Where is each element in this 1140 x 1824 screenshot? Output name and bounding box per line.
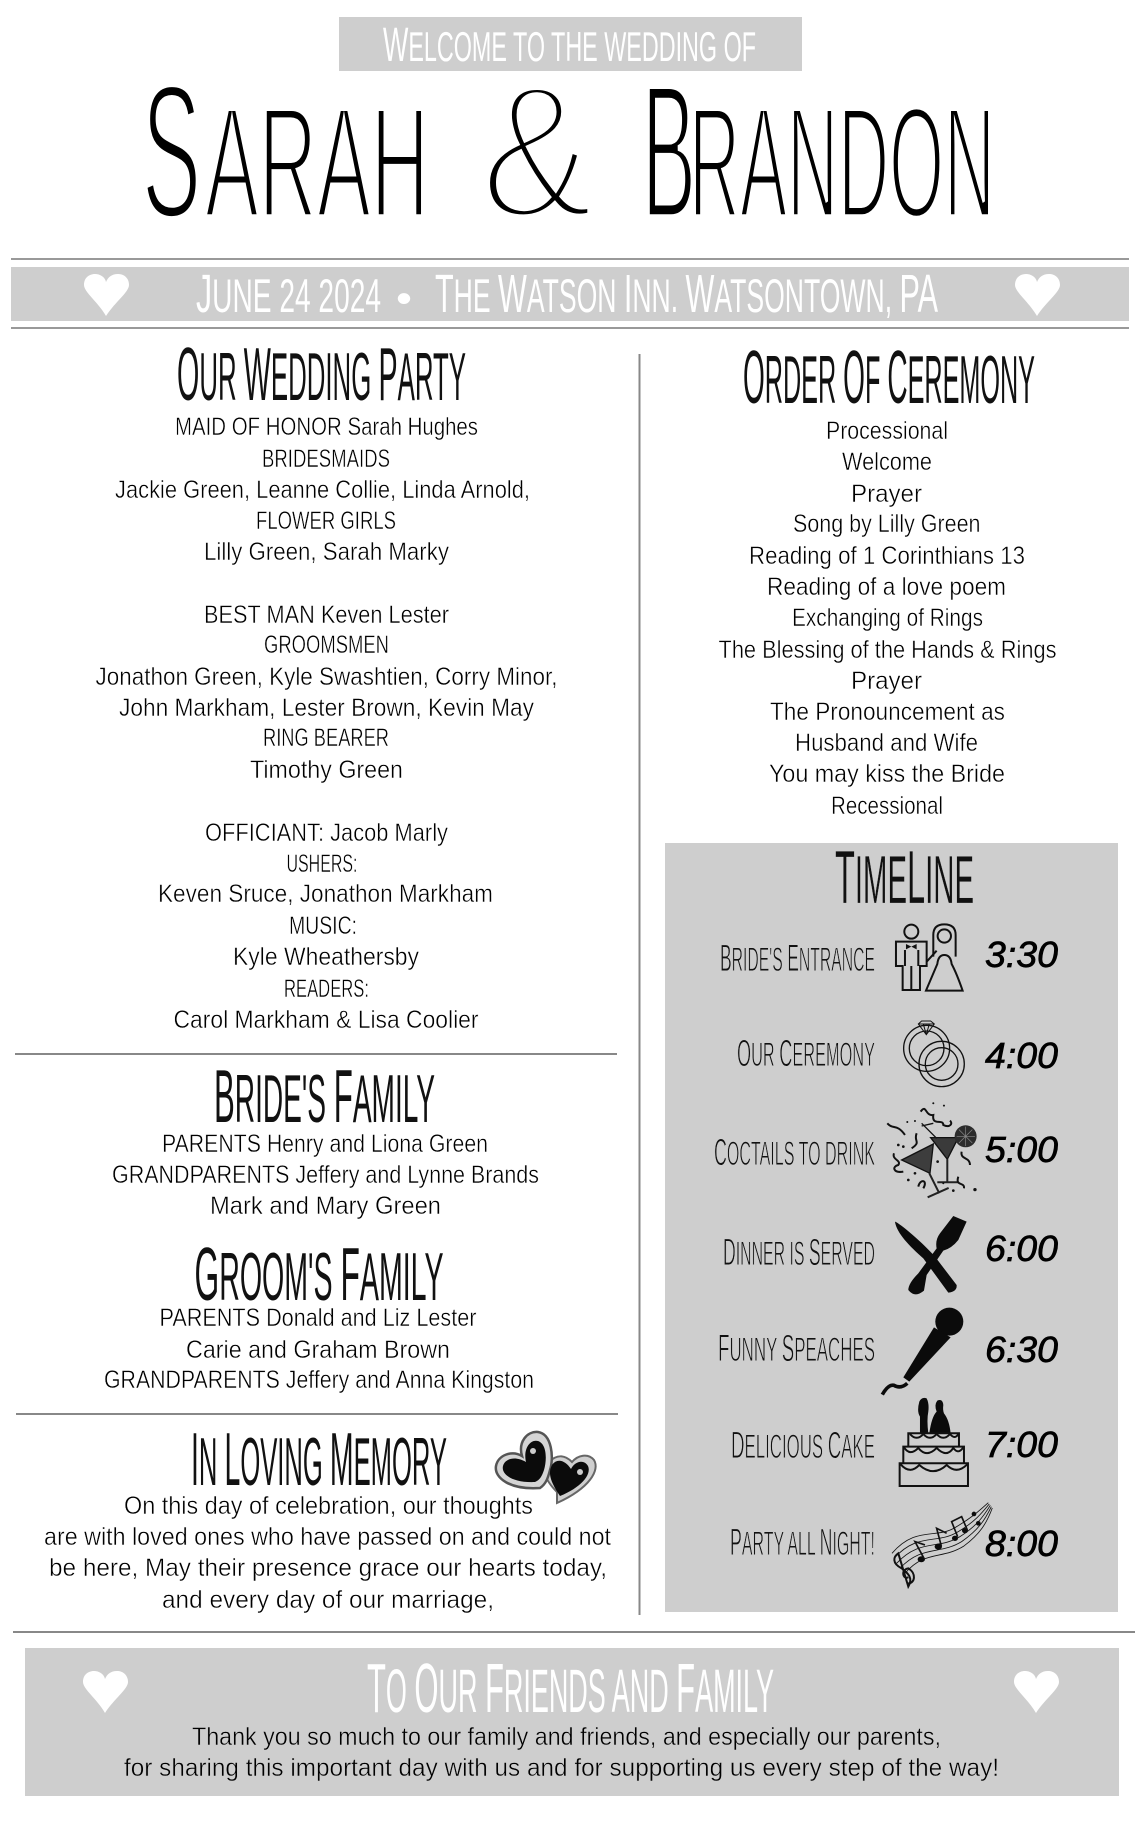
ceremony list: Song by Lilly Green [793,510,980,538]
wedding party list: OFFICIANT: Jacob Marly [205,819,448,847]
wedding party list: USHERS: [286,850,358,878]
ceremony list: You may kiss the Bride [769,760,1005,788]
panel: thank you footer [25,1648,1119,1796]
wedding party list: READERS: [284,975,369,1003]
row labels: FUNNY SPEACHES [718,1328,875,1370]
ceremony list: Husband and Wife [795,729,978,757]
groom's family list: GRANDPARENTS Jeffery and Anna Kingston [104,1366,534,1394]
title: couple names: ARAH [205,75,429,251]
ceremony list: Welcome [842,448,932,476]
row times [985,934,1058,1564]
panel: in loving memory [44,1417,611,1614]
wedding party list: MUSIC: [289,912,357,940]
ceremony list: Reading of a love poem [767,573,1006,601]
panel: order of ceremony [718,335,1056,820]
row labels: DINNER IS SERVED [723,1232,875,1274]
ceremony list [718,417,1056,820]
icon: bride and groom [896,924,963,991]
column divider [638,354,640,1615]
row labels: OUR CEREMONY [737,1033,875,1075]
wedding party list: FLOWER GIRLS [256,507,396,535]
row times: 5:00 [985,1129,1058,1170]
footer heading: TO OUR FRIENDS AND FAMILY [367,1649,774,1727]
wedding party list: MAID OF HONOR Sarah Hughes [175,413,478,441]
row labels: PARTY ALL NIGHT! [730,1522,875,1564]
icon: heart right [1015,274,1060,316]
wedding party list: Jackie Green, Leanne Collie, Linda Arnold, [115,476,530,504]
wedding party list: Jonathon Green, Kyle Swashtien, Corry Minor, [96,663,558,691]
wedding party list: GROOMSMEN [264,631,389,659]
icon: microphone [882,1308,963,1395]
wedding party list: Carol Markham & Lisa Coolier [174,1006,478,1034]
row labels: BRIDE'S ENTRANCE [720,938,875,980]
memorial text: be here, May their presence grace our hearts today, [49,1554,607,1582]
ceremony list: Processional [826,417,948,445]
icon: wedding cake [900,1398,968,1486]
wedding party list [96,413,558,1034]
wedding party list: Lilly Green, Sarah Marky [204,538,449,566]
welcome banner: WELCOME TO THE WEDDING OF [383,19,756,72]
groom's family list [104,1304,534,1394]
row times: 6:00 [985,1228,1058,1269]
row labels: DELICIOUS CAKE [731,1425,875,1467]
memorial text: On this day of celebration, our thoughts [124,1492,533,1520]
bride's family list: Mark and Mary Green [210,1192,441,1220]
ceremony list: The Pronouncement as [770,698,1005,726]
panel: timeline: COCTAILS TO DRINK [714,1132,875,1174]
memorial text: and every day of our marriage, [162,1586,494,1614]
panel: bride's family [112,1054,539,1220]
ceremony list: Prayer [851,480,922,508]
panel: timeline [665,835,1118,1612]
heading: time line: TIMELINE [835,835,974,919]
memorial text [44,1492,611,1614]
icon: knife and fork [895,1216,967,1294]
icon: two hearts [496,1432,596,1503]
welcome banner [339,17,802,72]
row times: 3:30 [985,934,1058,975]
icon: cocktails [887,1102,977,1197]
panel: wedding party [96,332,558,1034]
wedding party list: John Markham, Lester Brown, Kevin May [119,694,534,722]
heading: in loving memory: IN LOVING MEMORY [191,1417,447,1501]
date and venue band [11,258,1129,329]
footer message: Thank you so much to our family and friends, and especially our parents, [192,1723,941,1751]
row times: 6:30 [985,1329,1058,1370]
wedding party list: BRIDESMAIDS [262,445,390,473]
date and venue text: JUNE 24 2024 [196,264,494,324]
icon: heart left [84,274,129,316]
icon: music notes [892,1503,992,1587]
ceremony list: Exchanging of Rings [792,604,983,632]
row times: 8:00 [985,1523,1058,1564]
footer message: for sharing this important day with us and for supporting us every step of the way! [124,1754,999,1782]
bride's family list: PARENTS Henry and Liona Green [162,1130,488,1158]
bride's family list: GRANDPARENTS Jeffery and Lynne Brands [112,1161,539,1189]
title: couple names: B [642,46,696,258]
title: couple names: & [480,46,594,258]
footer message [124,1723,999,1782]
heading: groom's family: GROOM'S FAMILY [194,1232,444,1316]
panel: groom's family [104,1232,534,1394]
groom's family list: PARENTS Donald and Liz Lester [160,1304,476,1332]
icon: wedding rings [904,1021,964,1087]
date and venue text: THE WATSON INN. WATSONTOWN, PA [435,264,1028,324]
heading: our wedding party: OUR WEDDING PARTY [177,332,466,416]
ceremony list: Prayer [851,667,922,695]
row labels [714,938,875,1564]
icon: heart right [1014,1671,1059,1713]
wedding party list: RING BEARER [263,724,389,752]
ceremony list: Recessional [831,792,943,820]
date and venue text: • [396,277,412,321]
icon: heart left [83,1671,128,1713]
groom's family list: Carie and Graham Brown [186,1336,450,1364]
memorial text: are with loved ones who have passed on and could not [44,1523,611,1551]
title: couple names: S [142,46,201,258]
heading: bride's family: BRIDE'S FAMILY [214,1054,435,1138]
wedding party list: Timothy Green [250,756,403,784]
wedding party list: Keven Sruce, Jonathon Markham [158,880,493,908]
ceremony list: Reading of 1 Corinthians 13 [749,542,1025,570]
wedding party list: BEST MAN Keven Lester [204,601,449,629]
ceremony list: The Blessing of the Hands & Rings [718,636,1056,664]
row times: 4:00 [985,1035,1058,1076]
bride's family list [112,1130,539,1220]
wedding party list: Kyle Wheathersby [233,943,419,971]
row times: 7:00 [985,1424,1058,1465]
